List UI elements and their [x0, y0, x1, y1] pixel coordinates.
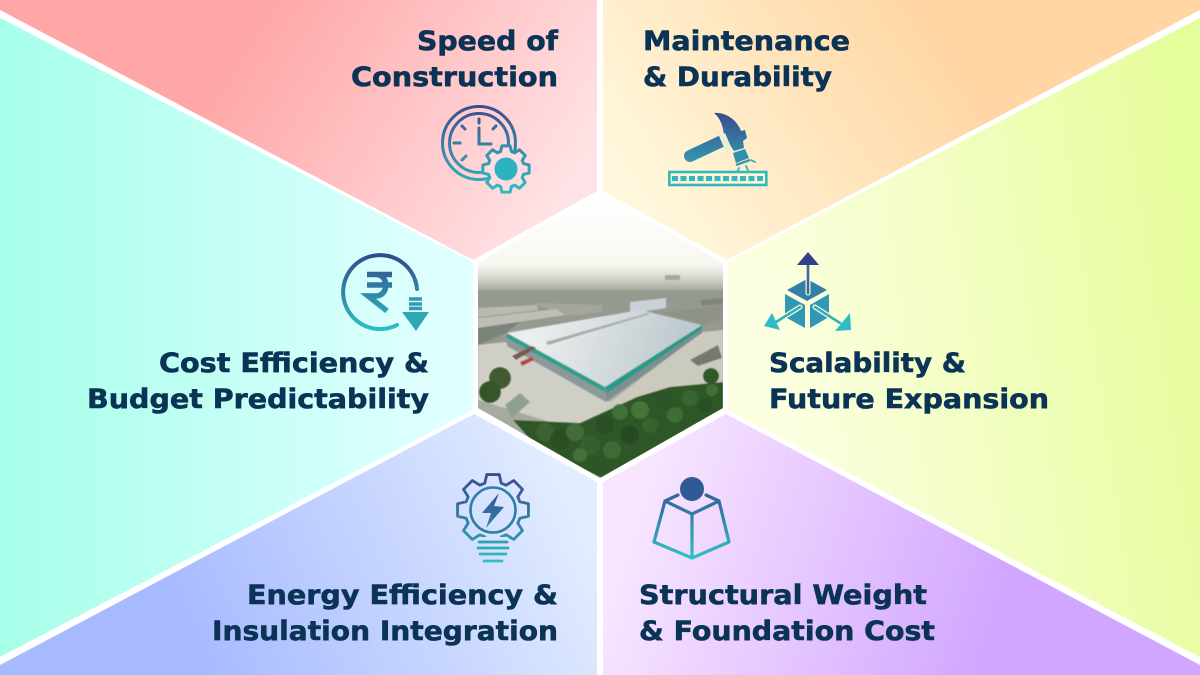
heading: Energy Efficiency & Insulation Integration: Insulation Integration — [212, 616, 558, 647]
heading: Energy Efficiency & Insulation Integration — [212, 580, 558, 647]
heading: Scalability & Future Expansion: Scalability & — [769, 348, 966, 379]
panel: energy efficiency background — [0, 414, 597, 675]
heading: Speed of Construction: Construction — [351, 62, 558, 93]
icon: gear light bulb — [458, 475, 528, 561]
heading: Structural Weight & Foundation Cost: & Foundation Cost — [639, 616, 935, 647]
icon: box with sphere on top — [654, 477, 729, 558]
icon: hammer striking ruler — [669, 113, 766, 185]
heading: Cost Efficiency & Budget Predictability: Cost Efficiency & — [159, 348, 429, 379]
heading: Scalability & Future Expansion: Future Expansion — [769, 384, 1049, 415]
panel: cost efficiency background — [0, 18, 473, 657]
heading: Structural Weight & Foundation Cost: Structural Weight — [639, 580, 927, 611]
heading: Cost Efficiency & Budget Predictability — [87, 348, 429, 415]
heading: Scalability & Future Expansion — [769, 348, 1049, 415]
panel: maintenance and durability background — [603, 0, 1200, 260]
heading: Speed of Construction — [351, 26, 558, 93]
icon: cube with three arrows — [764, 252, 851, 331]
panel: scalability background — [728, 18, 1200, 657]
heading: Cost Efficiency & Budget Predictability: Budget Predictability — [87, 384, 429, 415]
heading: Maintenance & Durability: Maintenance — [643, 26, 850, 57]
heading: Maintenance & Durability: & Durability — [643, 62, 832, 93]
panel: structural weight background — [603, 414, 1200, 675]
heading: Structural Weight & Foundation Cost — [639, 580, 935, 647]
panel: speed of construction background — [0, 0, 597, 260]
central hexagon photo: warehouse aerial view — [478, 235, 723, 478]
icon: clock with gear — [442, 106, 529, 192]
heading: Maintenance & Durability — [643, 26, 850, 93]
heading: Energy Efficiency & Insulation Integration: Energy Efficiency & — [247, 580, 558, 611]
heading: Speed of Construction: Speed of — [417, 26, 558, 57]
icon: rupee with down arrow — [343, 255, 429, 331]
